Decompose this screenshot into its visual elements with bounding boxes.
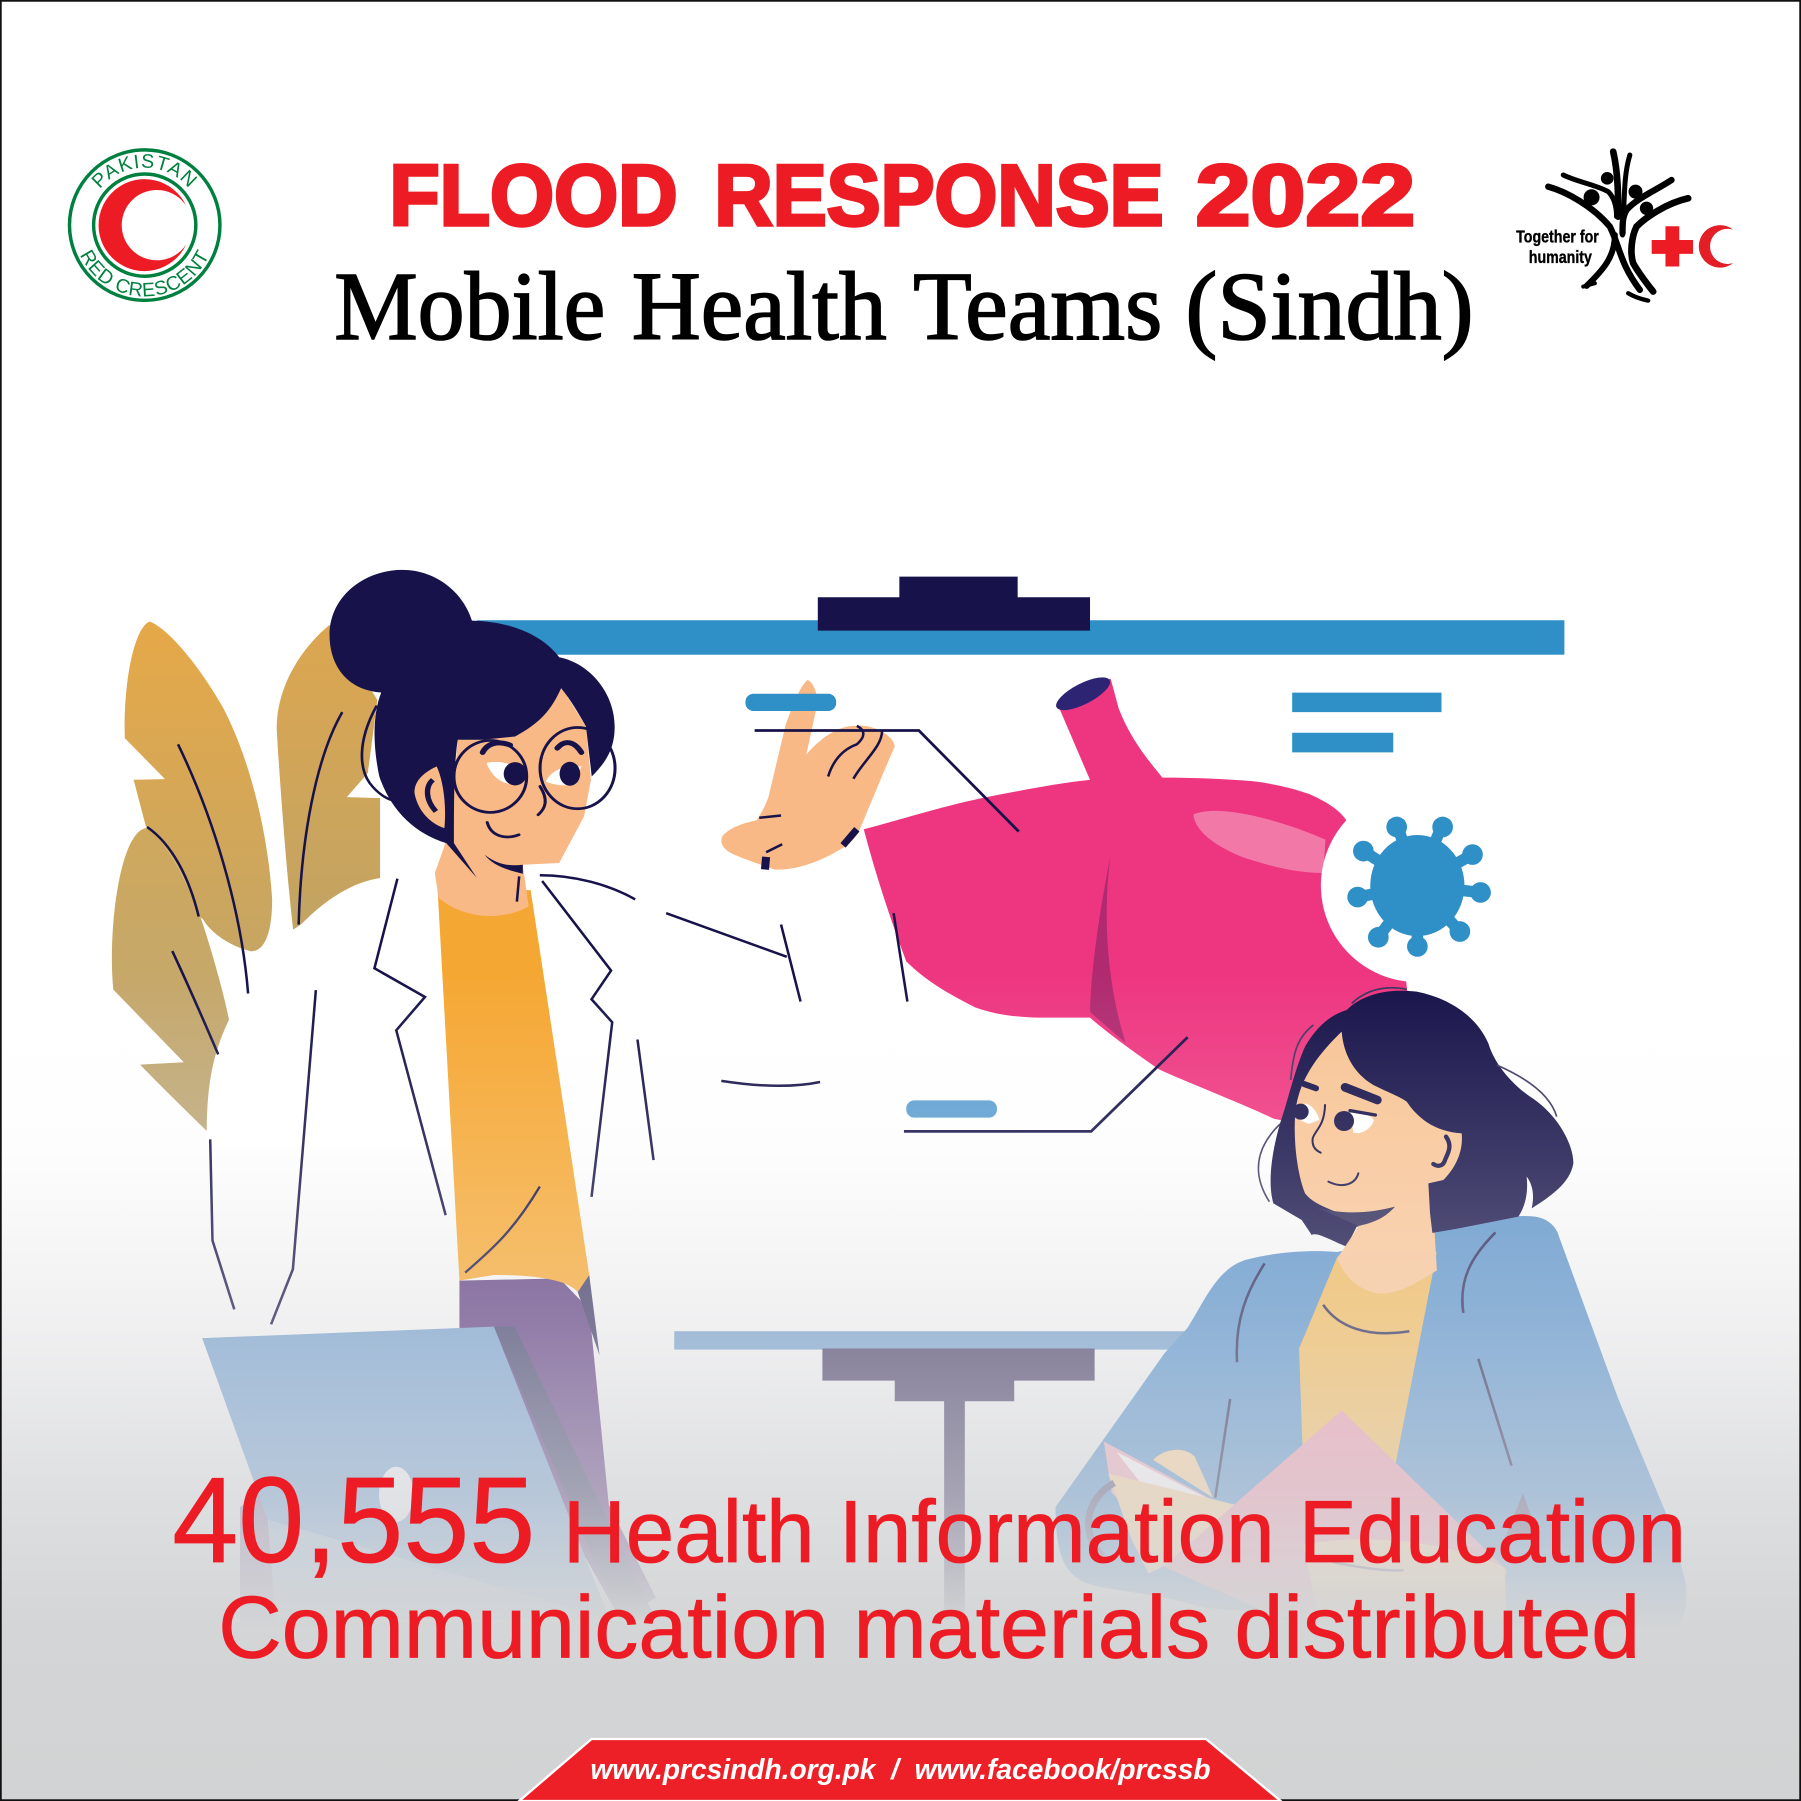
laptop: [202, 1327, 656, 1620]
jaw shadow: [1317, 1207, 1395, 1226]
logo: Together for humanity: [1516, 152, 1733, 301]
logo: Pakistan Red Crescent: PAKISTAN: [91, 154, 198, 188]
title: RESPONSE: [714, 148, 1164, 244]
jaw shadow: [485, 855, 523, 874]
board text bars: [1292, 693, 1441, 752]
statistic line 1: 40,555: [172, 1452, 535, 1588]
icon: red crescent: [1699, 225, 1733, 268]
eyes: [486, 762, 526, 785]
laptop logo: [379, 1467, 413, 1522]
stomach organ: [864, 671, 1424, 1149]
subtitle: (Sindh): [1185, 253, 1474, 361]
doctor hand: [721, 680, 895, 870]
title: 2022: [1196, 148, 1415, 244]
book and hands: [1104, 1441, 1213, 1528]
label line to stomach: [755, 731, 1019, 832]
glasses, brows, nose and mouth: [362, 707, 615, 837]
skin upper chest: [1337, 1232, 1437, 1294]
table: [674, 1331, 1191, 1620]
logo: Pakistan Red Crescent: [68, 148, 222, 302]
coat lines: [210, 875, 907, 1324]
footer banner: [519, 1739, 1281, 1801]
stomach fold: [1090, 855, 1126, 1043]
doctor head: [330, 570, 615, 916]
lab coat (white): [207, 875, 450, 1149]
ear: [414, 766, 445, 828]
plant leaves: [112, 622, 380, 1131]
stomach highlight: [1193, 811, 1325, 873]
jacket collar over neck: [1435, 1216, 1579, 1298]
face and neck: [1295, 1032, 1462, 1263]
white disc behind virus: [1321, 789, 1514, 982]
statistic line 1: Health Information Education: [563, 1482, 1686, 1581]
board label pill bottom: [906, 1100, 997, 1118]
hair: [330, 570, 615, 878]
statistic line 1: [172, 1452, 1686, 1588]
neck and face: [435, 687, 591, 916]
folder: [1164, 1410, 1507, 1631]
logo: Pakistan Red Crescent: RED CRESCENT: [80, 249, 207, 296]
panel: blue board rail: [477, 620, 1564, 655]
shirt fold: [465, 1187, 540, 1273]
subtitle: Health: [632, 253, 887, 361]
icon: virus: [1347, 817, 1491, 957]
statistic line 2: Communication materials distributed: [218, 1577, 1640, 1676]
doctor shirt: [438, 890, 589, 1292]
jacket: [1056, 1216, 1686, 1642]
subtitle: Mobile: [334, 253, 605, 361]
footer banner: www.prcsindh.org.pk / www.facebook/prcssb: [590, 1754, 1211, 1786]
title: FLOOD: [389, 148, 678, 244]
board label pill top: [745, 694, 836, 711]
doctor far leg: [240, 1482, 345, 1640]
tagline: Together for: [1516, 226, 1599, 246]
leaf veins: [147, 712, 342, 1054]
lower label line: [904, 1037, 1188, 1131]
stomach opening: [1052, 671, 1114, 717]
hair: [1271, 991, 1573, 1247]
illustration: classroom scene: [112, 570, 1686, 1642]
dark board clip: [818, 577, 1090, 631]
hand finger lines and cuff: [759, 726, 882, 869]
head: [1258, 988, 1573, 1263]
icon: red cross: [1652, 226, 1693, 266]
seated woman: [1056, 988, 1686, 1642]
right hand: [1304, 1539, 1507, 1631]
inner shirt: [1299, 1252, 1437, 1482]
figures: [1548, 152, 1688, 301]
eyes and brows: [1300, 1103, 1319, 1124]
jacket lines: [1215, 1232, 1512, 1498]
subtitle: [334, 253, 1474, 361]
subtitle: Teams: [913, 253, 1162, 361]
title: [389, 148, 1415, 244]
thin hair outlines: [1258, 988, 1557, 1202]
doctor trousers: [459, 1278, 656, 1620]
jacket line over collar: [1462, 1232, 1495, 1313]
logo: Together for humanity: humanity: [1529, 247, 1592, 267]
